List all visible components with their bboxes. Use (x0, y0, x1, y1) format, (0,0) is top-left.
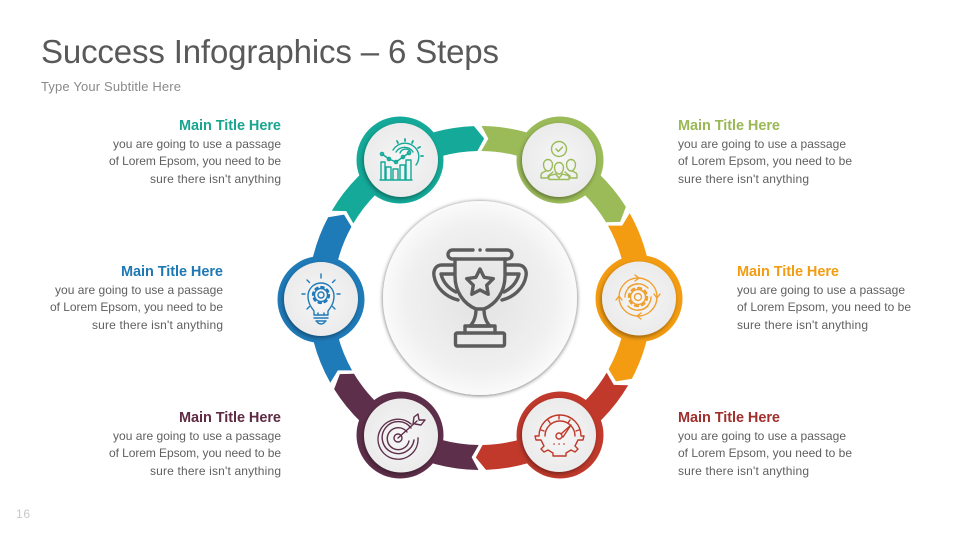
text block: red: you are going to use a passage (678, 429, 846, 443)
node: red gauge (516, 392, 604, 478)
icon: target with arrow (378, 414, 425, 459)
text block: green (678, 118, 852, 186)
ring arrow: orange (546, 213, 702, 386)
ring arrow: teal (332, 86, 487, 259)
text block: green: Main Title Here (678, 118, 780, 134)
text block: red (678, 410, 852, 478)
icon: gear with cycle arrows (616, 275, 660, 319)
text block: red: of Lorem Epsom, you need to be (678, 446, 852, 460)
text block: blue: you are going to use a passage (55, 283, 223, 297)
text block: orange (737, 264, 911, 332)
text block: blue: Main Title Here (121, 264, 223, 280)
icon: trophy (434, 250, 526, 346)
text block: green: of Lorem Epsom, you need to be (678, 154, 852, 168)
node: purple target (356, 392, 444, 478)
node: orange cycle (596, 255, 682, 342)
text block: teal: sure there isn't anything (150, 172, 281, 186)
text block: blue (50, 264, 223, 332)
text block: teal: you are going to use a passage (113, 137, 281, 151)
text block: red: Main Title Here (678, 410, 780, 426)
icon: speedometer gear (535, 415, 584, 456)
text block: purple: of Lorem Epsom, you need to be (109, 446, 281, 460)
text block: orange: you are going to use a passage (737, 283, 905, 297)
text block: green: you are going to use a passage (678, 137, 846, 151)
node: green team (516, 116, 604, 204)
text block: teal: of Lorem Epsom, you need to be (109, 154, 281, 168)
text block: blue: of Lorem Epsom, you need to be (50, 300, 223, 314)
ring arrow: blue (258, 210, 414, 383)
central disc with trophy (383, 201, 577, 395)
text block: purple (109, 410, 281, 478)
text block: orange: sure there isn't anything (737, 318, 868, 332)
text block: orange: Main Title Here (737, 264, 839, 280)
icon: light bulb with gear (302, 274, 340, 324)
text block: purple: you are going to use a passage (113, 429, 281, 443)
text block: blue: sure there isn't anything (92, 318, 223, 332)
node: blue idea (278, 256, 364, 343)
ring arrow: red (473, 337, 628, 510)
page number: 16 (16, 507, 30, 521)
title: Success Infographics – 6 Steps (41, 33, 499, 70)
text block: orange: of Lorem Epsom, you need to be (737, 300, 911, 314)
icon: chart and gear (380, 139, 423, 180)
text block: green: sure there isn't anything (678, 172, 809, 186)
node: teal analytics (356, 116, 444, 204)
text block: purple: sure there isn't anything (150, 464, 281, 478)
ring arrow: purple (334, 374, 479, 470)
text block: teal: Main Title Here (179, 118, 281, 134)
ring arrow: green (481, 126, 626, 222)
text block: red: sure there isn't anything (678, 464, 809, 478)
subtitle: Type Your Subtitle Here (41, 79, 181, 94)
text block: teal (109, 118, 281, 186)
text block: purple: Main Title Here (179, 410, 281, 426)
icon: team with check (541, 142, 577, 180)
